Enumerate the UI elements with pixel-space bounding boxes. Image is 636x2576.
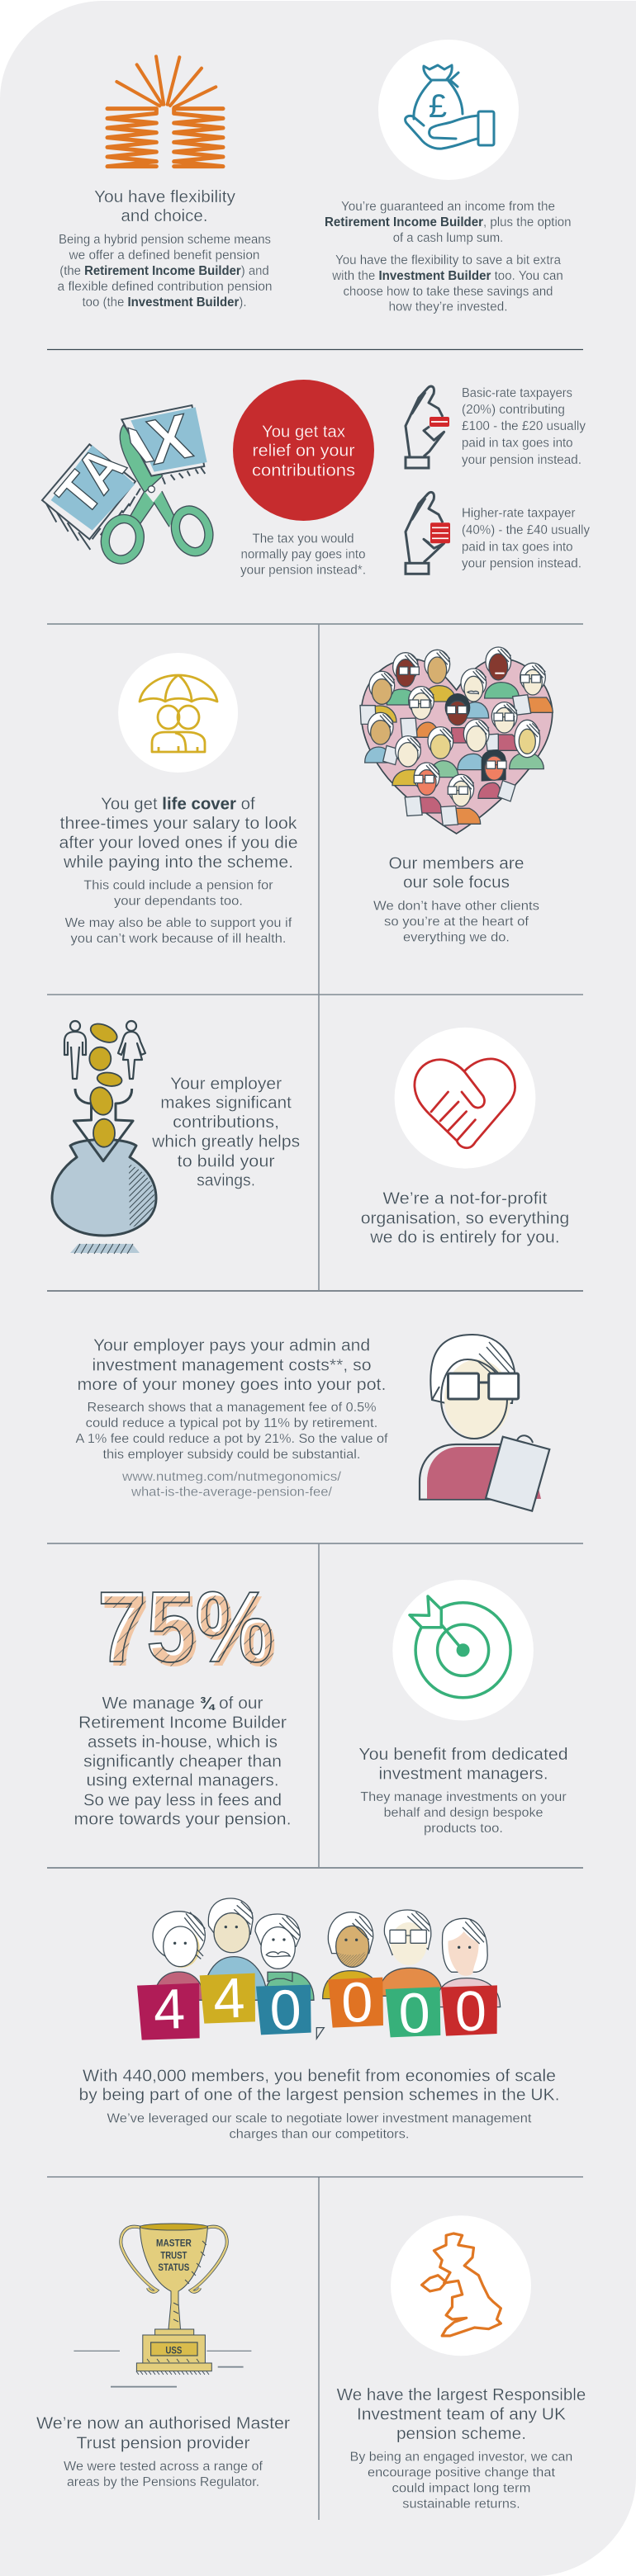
heading: life cover: after your loved ones if you die — [59, 833, 297, 852]
text: employer contributions: Your employer — [170, 1074, 282, 1093]
heading: life cover: You get life cover of — [101, 795, 255, 814]
card: fifth digit 0: 0 — [454, 1979, 487, 2044]
text: no other clients: everything we do. — [403, 930, 510, 944]
text: tax goes into pension: The tax you would — [253, 532, 354, 546]
text: employer contributions: which greatly helps — [151, 1132, 300, 1151]
text: not-for-profit: We’re a not-for-profit — [383, 1189, 548, 1208]
card: fifth digit 0 — [441, 1979, 497, 2044]
callout: tax relief circle: contributions — [252, 461, 355, 480]
text: pensions regulator: We were tested across a range of — [64, 2460, 263, 2474]
text: assets in-house: assets in-house, which is — [88, 1732, 278, 1751]
text: basic-rate taxpayers: (20%) contributing — [462, 403, 565, 417]
card: first digit 4: 4 — [153, 1978, 186, 2041]
text: research: could reduce a typical pot by 11% by retirement. — [86, 1416, 377, 1430]
text: pensions regulator — [64, 2460, 263, 2489]
icon: heart of members — [358, 647, 553, 834]
card: first digit 0 — [256, 1978, 311, 2042]
heading: members: our sole focus — [403, 873, 510, 892]
text: pensions regulator: areas by the Pensions Regulator. — [67, 2475, 259, 2489]
card: first digit 4 — [137, 1978, 200, 2041]
panel: responsible investment — [337, 2215, 586, 2511]
text: source link: www.nutmeg.com/nutmegonomics/ — [121, 1470, 342, 1484]
icon: spring — [107, 56, 223, 167]
heading: responsible investment: pension scheme. — [396, 2424, 526, 2443]
text: hybrid scheme: too (the Investment Builder). — [83, 295, 247, 310]
text: dependants and ill health: you can’t work because of ill health. — [71, 932, 286, 946]
heading: dedicated managers: You benefit from dedicated — [358, 1745, 568, 1764]
callout: tax relief circle — [233, 380, 374, 521]
text: assets in-house: Retirement Income Builder — [78, 1713, 287, 1732]
chart: 75 percent figure: 75% — [101, 1575, 277, 1687]
heading: responsible investment — [337, 2385, 586, 2443]
text: not-for-profit: organisation, so everything — [361, 1208, 569, 1227]
chart: 75 percent figure: 75% — [97, 1571, 273, 1683]
icon: trophy: MASTER — [156, 2239, 192, 2249]
text: assets in-house: significantly cheaper than — [83, 1751, 282, 1770]
text: engaged investor: encourage positive change that — [368, 2465, 556, 2479]
icon: trophy: TRUST — [160, 2251, 187, 2261]
panel: economies of scale — [79, 1898, 560, 2141]
text: source link — [121, 1470, 342, 1500]
panel: assets in-house — [74, 1571, 291, 1829]
heading: dedicated managers — [358, 1745, 568, 1783]
chart: 75 percent figure: 75% — [101, 1575, 277, 1687]
divider lines — [47, 350, 583, 2520]
text: bespoke products — [360, 1790, 567, 1836]
text: basic-rate taxpayers: your pension instead. — [462, 453, 581, 467]
text: engaged investor: By being an engaged investor, we can — [350, 2450, 572, 2464]
icon: money bag in hand — [378, 40, 519, 180]
text: guaranteed income: how they’re invested. — [388, 300, 507, 314]
icon: scissors cutting tax — [42, 401, 215, 564]
panel: guaranteed income — [325, 40, 572, 314]
text: research: this employer subsidy could be substantial. — [102, 1448, 361, 1462]
heading: responsible investment: Investment team of any UK — [357, 2405, 566, 2424]
text: dependants and ill health — [65, 879, 292, 946]
icon: handshake heart — [395, 1028, 535, 1169]
card: first digit 0: 0 — [268, 1978, 302, 2042]
text: assets in-house: We manage ¾ of our — [102, 1694, 263, 1713]
icon: scissors cutting tax: TA — [45, 433, 138, 527]
heading: flexibility: and choice. — [121, 206, 208, 225]
card: fourth digit 0: 0 — [397, 1982, 431, 2045]
panel: admin costs — [76, 1335, 549, 1511]
icon: UK map — [391, 2215, 531, 2356]
icon: umbrella over two people — [118, 653, 238, 773]
heading: life cover: three-times your salary to look — [59, 814, 297, 833]
icon: person with glasses and document — [420, 1335, 549, 1511]
text: no other clients: so you’re at the heart of — [384, 915, 529, 929]
heading: admin costs — [78, 1336, 387, 1394]
text: tax goes into pension — [240, 532, 366, 578]
text: guaranteed income: of a cash lump sum. — [393, 231, 503, 245]
icon: target with arrow — [392, 1580, 534, 1721]
text: source link: what-is-the-average-pension-fee/ — [131, 1486, 333, 1500]
heading: master trust: We’re now an authorised Master — [36, 2414, 290, 2433]
punctuation: comma — [316, 2028, 324, 2039]
text: no other clients — [373, 899, 539, 944]
text: tax goes into pension: your pension instead*. — [240, 564, 366, 578]
text: assets in-house — [74, 1694, 291, 1829]
heading: responsible investment: We have the largest Responsible — [337, 2385, 586, 2404]
heading: economies of scale: by being part of one of the largest pension schemes in the UK. — [79, 2086, 560, 2105]
text: engaged investor: sustainable returns. — [402, 2497, 520, 2511]
text: guaranteed income: with the Investment Builder too. You can — [331, 269, 563, 283]
heading: master trust: Trust pension provider — [76, 2433, 250, 2452]
text: lower charges: We’ve leveraged our scale to negotiate lower investment management — [107, 2111, 532, 2125]
icon: money bag in hand: £ — [429, 88, 447, 125]
text: research: Research shows that a management fee of 0.5% — [88, 1401, 377, 1415]
card: fourth digit 0 — [386, 1982, 440, 2045]
panel: not-for-profit — [361, 1028, 569, 1247]
text: guaranteed income: Retirement Income Builder, plus the option — [325, 215, 572, 229]
text: higher-rate taxpayer: your pension instead. — [462, 557, 581, 571]
text: engaged investor — [350, 2450, 572, 2511]
text: higher-rate taxpayer: Higher-rate taxpayer — [462, 507, 575, 521]
card: second digit 4 — [200, 1967, 255, 2030]
text: guaranteed income: You’re guaranteed an income from the — [341, 200, 555, 214]
text: hybrid scheme — [58, 233, 273, 310]
heading: life cover — [59, 795, 297, 872]
card: third digit 0 — [328, 1971, 383, 2035]
text: employer contributions: contributions, — [173, 1113, 279, 1132]
panel: flexibility and choice — [58, 56, 273, 310]
text: not-for-profit: we do is entirely for you. — [369, 1228, 560, 1247]
heading: flexibility: You have flexibility — [94, 187, 236, 206]
heading: members: Our members are — [388, 853, 524, 872]
text: higher-rate taxpayer: paid in tax goes into — [462, 540, 573, 554]
heading: admin costs: more of your money goes into your pot. — [78, 1375, 387, 1394]
text: higher-rate taxpayer: (40%) - the £40 usually — [462, 523, 590, 537]
text: not-for-profit — [361, 1189, 569, 1247]
icon: coins falling into pot — [52, 1020, 156, 1254]
text: dependants and ill health: This could include a pension for — [83, 879, 273, 893]
text: bespoke products: behalf and design bespoke — [383, 1806, 543, 1820]
panel: tax relief — [42, 380, 590, 578]
heading: flexibility — [94, 187, 236, 225]
icon: scissors cutting tax: X — [141, 401, 197, 479]
icon: hand holding tall coin stack — [406, 492, 450, 574]
text: engaged investor: could impact long term — [392, 2481, 530, 2495]
heading: admin costs: Your employer pays your admin and — [93, 1336, 370, 1355]
panel: life cover — [59, 653, 297, 946]
card: second digit 4: 4 — [212, 1967, 246, 2030]
icon: people holding 440,000 cards — [137, 1898, 501, 2045]
heading: dedicated managers: investment managers. — [378, 1764, 548, 1783]
text: lower charges — [107, 2111, 532, 2141]
text: guaranteed income: choose how to take these savings and — [344, 285, 553, 299]
text: employer contributions: to build your — [178, 1151, 275, 1170]
panel: dedicated managers — [358, 1580, 568, 1836]
text: dependants and ill health: your dependants too. — [114, 895, 243, 909]
callout: tax relief circle: You get tax — [262, 423, 346, 441]
text: hybrid scheme: we offer a defined benefit pension — [69, 248, 259, 262]
panel: members focus — [358, 647, 553, 944]
text: employer contributions: makes significant — [160, 1094, 292, 1113]
chart: 75 percent figure: 75% — [97, 1571, 273, 1683]
text: employer contributions — [151, 1074, 300, 1190]
text: assets in-house: using external managers. — [86, 1771, 279, 1790]
text: no other clients: We don’t have other clients — [373, 899, 539, 913]
text: employer contributions: savings. — [197, 1171, 255, 1190]
text: guaranteed income: You have the flexibility to save a bit extra — [335, 253, 561, 267]
text: research — [76, 1401, 388, 1462]
heading: admin costs: investment management costs**, so — [93, 1355, 372, 1374]
icon: hand holding one coin stack — [406, 386, 449, 468]
heading: master trust — [36, 2414, 290, 2452]
text: assets in-house: So we pay less in fees and — [83, 1790, 282, 1809]
heading: life cover: while paying into the scheme. — [63, 853, 293, 872]
text: assets in-house: more towards your pension. — [74, 1810, 291, 1829]
icon: trophy — [74, 2224, 251, 2387]
text: tax goes into pension: normally pay goes into — [241, 548, 365, 562]
text: dependants and ill health: We may also be able to support you if — [65, 916, 292, 930]
card: third digit 0: 0 — [340, 1971, 374, 2035]
text: lower charges: charges than our competitors. — [230, 2127, 410, 2141]
text: guaranteed income — [325, 200, 572, 314]
callout: tax relief circle: relief on your — [253, 442, 355, 461]
text: research: A 1% fee could reduce a pot by 21%. So the value of — [76, 1432, 388, 1446]
icon: trophy: STATUS — [158, 2263, 190, 2273]
text: basic-rate taxpayers — [462, 386, 586, 467]
panel: master trust — [36, 2224, 290, 2489]
text: bespoke products: They manage investments on your — [360, 1790, 567, 1804]
text: bespoke products: products too. — [424, 1822, 503, 1836]
heading: economies of scale: With 440,000 members, you benefit from economies of scale — [83, 2066, 556, 2085]
text: basic-rate taxpayers: £100 - the £20 usually — [462, 419, 586, 433]
icon: trophy: USS — [165, 2344, 182, 2356]
text: basic-rate taxpayers: Basic-rate taxpayers — [462, 386, 572, 400]
text: hybrid scheme: Being a hybrid pension scheme means — [59, 233, 271, 247]
text: hybrid scheme: (the Retirement Income Builder) and — [59, 264, 269, 278]
text: higher-rate taxpayer — [462, 507, 590, 571]
heading: members — [388, 853, 524, 892]
text: hybrid scheme: a flexible defined contribution pension — [58, 280, 273, 294]
panel: employer contributions — [52, 1020, 300, 1254]
heading: economies of scale — [79, 2066, 560, 2105]
text: basic-rate taxpayers: paid in tax goes into — [462, 437, 573, 451]
